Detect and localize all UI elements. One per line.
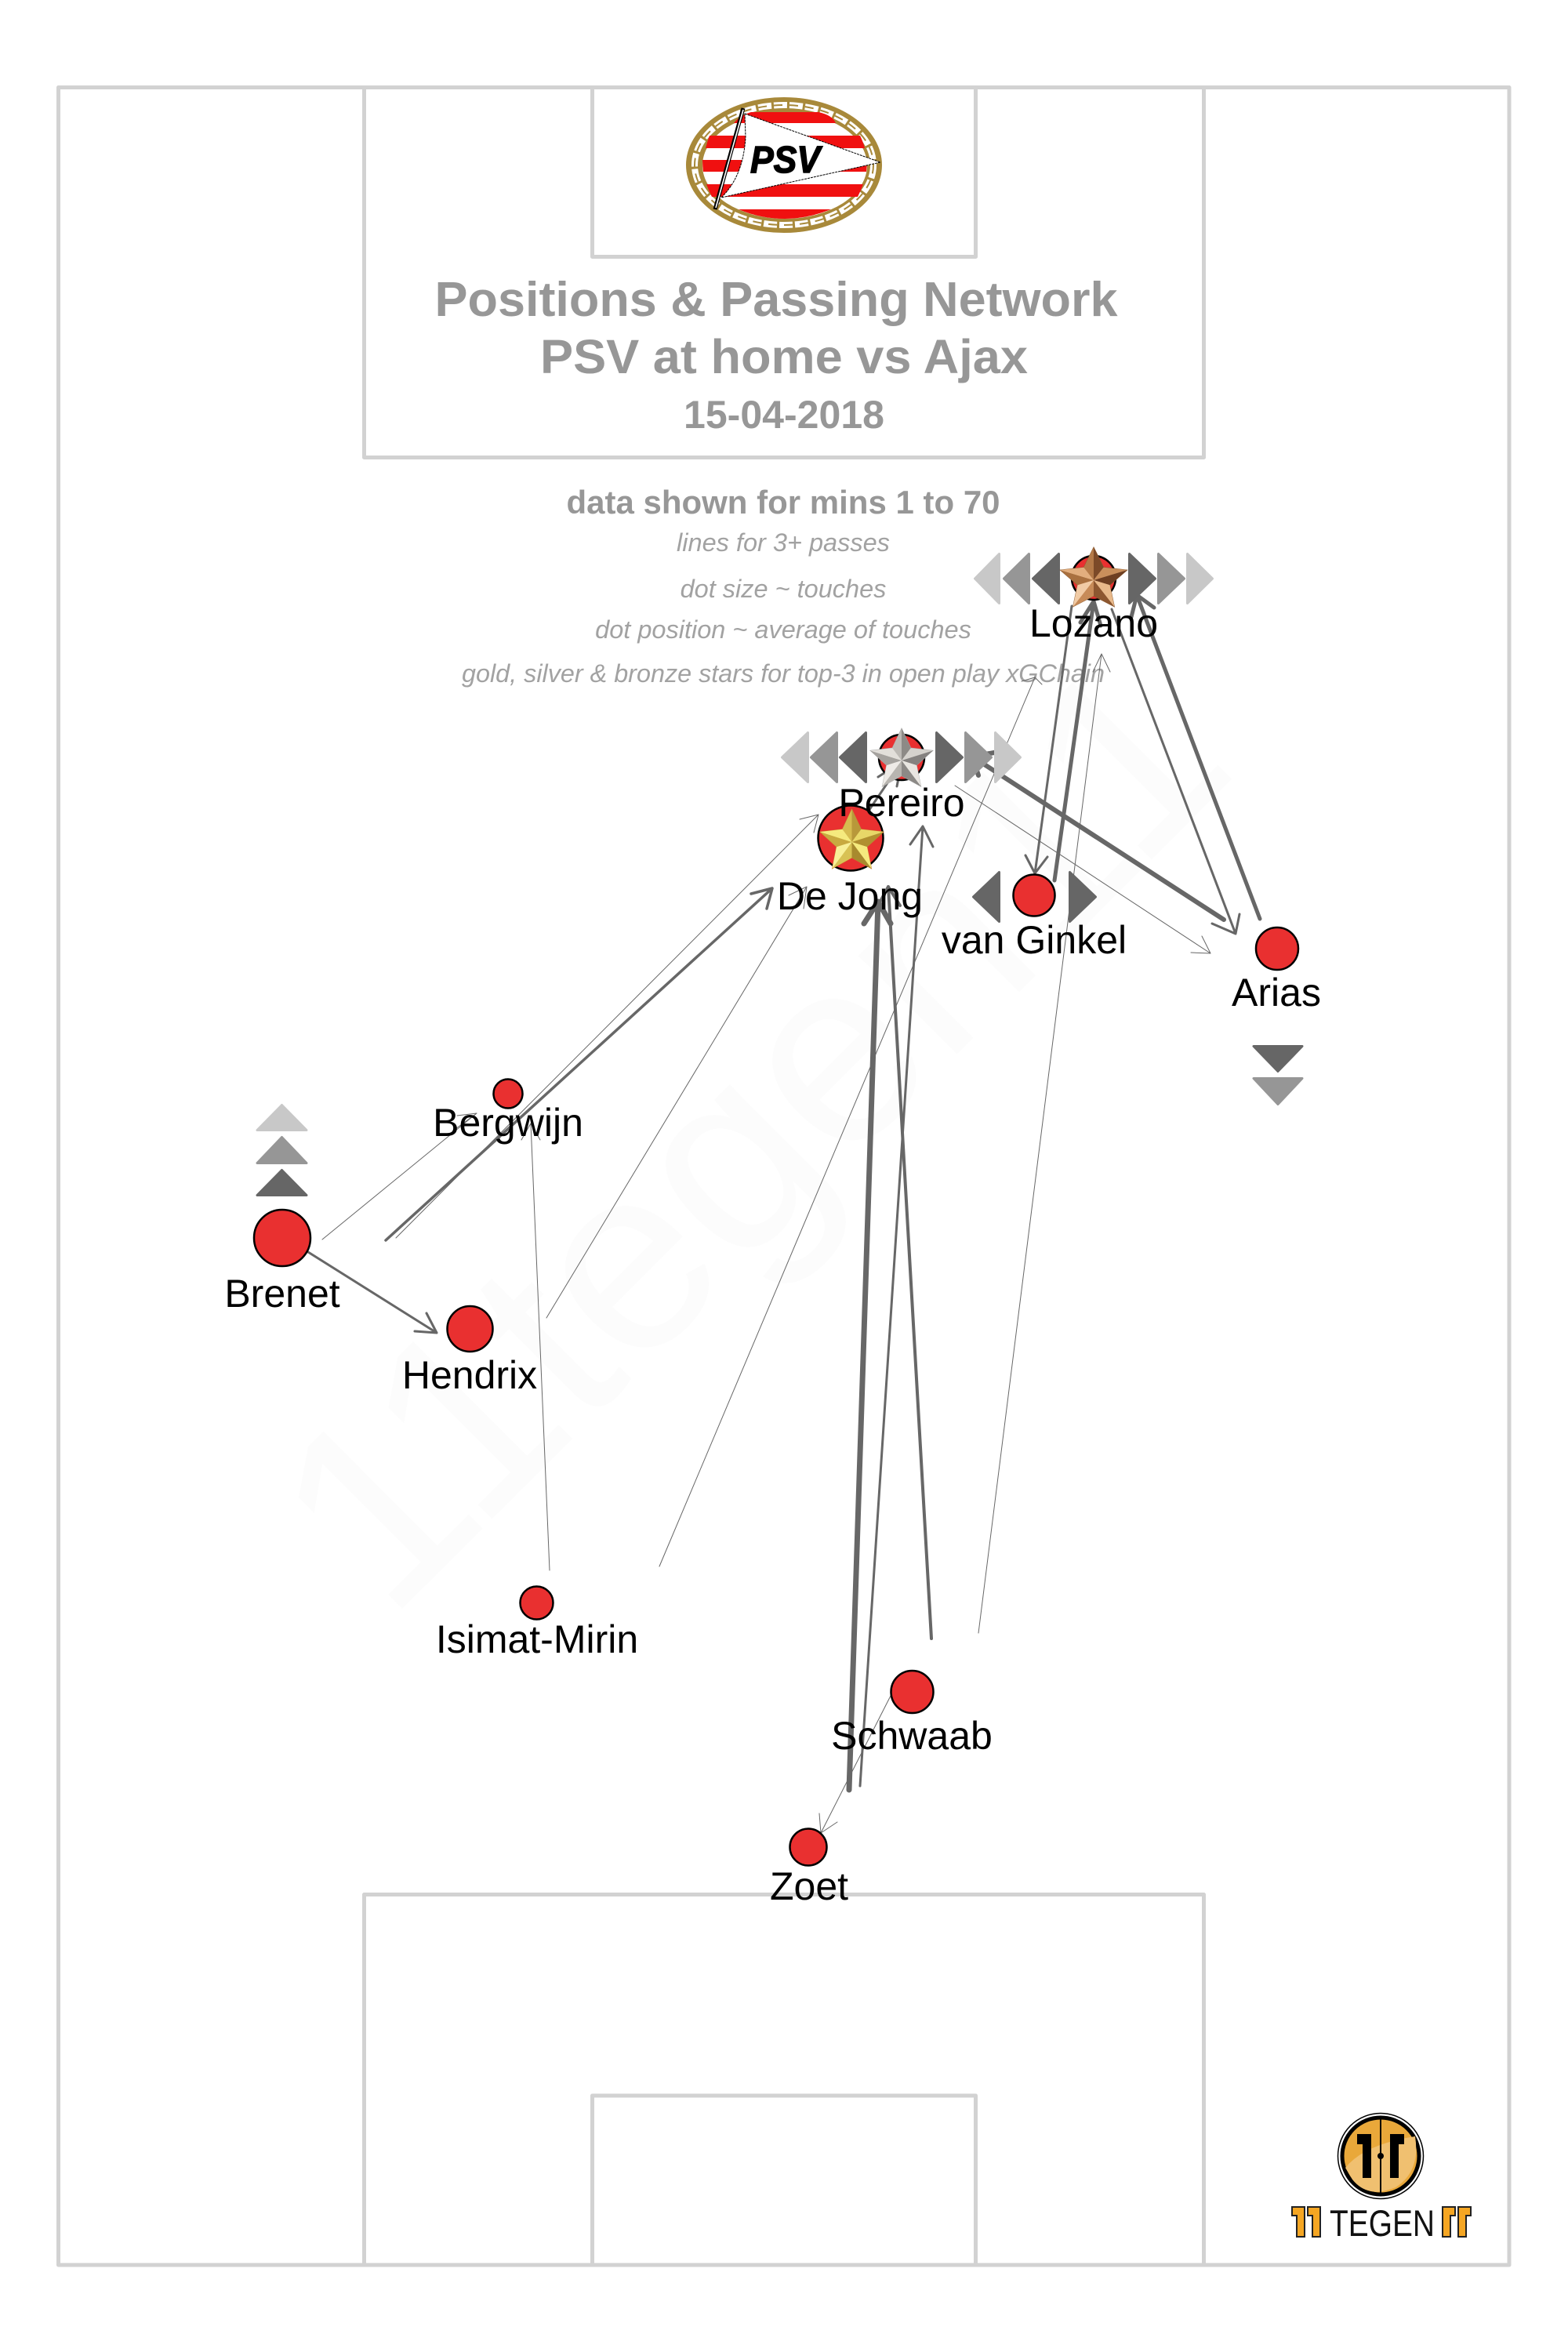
arrow: Lozano to van Ginkel [1025,606,1072,873]
player: Lozano [975,547,1212,645]
arrow: Brenet to De Jong (thin) [396,815,818,1238]
arrow: Zoet to De Jong [849,902,891,1790]
arrow: Brenet to Hendrix [308,1252,437,1333]
title: Positions & Passing Network [434,272,1118,327]
player: Pereiro [782,728,1021,825]
arrow: Schwaab to Pereiro [860,826,933,1786]
legend notes: lines for 3+ passes [677,528,890,557]
arrow: Brenet to De Jong (thick) [386,888,772,1240]
arrow: Pereiro to Arias [955,786,1210,953]
title [434,272,1118,437]
player: Brenet [224,1105,340,1316]
player: Brenet: Brenet [224,1272,340,1316]
icon: silver star [870,728,933,786]
player: Schwaab [831,1671,993,1758]
arrow: Arias to Pereiro [972,753,1224,920]
player: Schwaab: Schwaab [831,1714,993,1758]
passing network arrows [308,595,1260,1833]
title: PSV at home vs Ajax [540,330,1028,384]
player: van Ginkel: van Ginkel [942,918,1127,962]
legend notes: dot position ~ average of touches [595,615,971,644]
legend notes: dot size ~ touches [681,575,886,603]
player: Bergwijn: Bergwijn [433,1101,583,1145]
player: Zoet: Zoet [770,1864,848,1908]
player: Isimat-Mirin: Isimat-Mirin [436,1617,638,1661]
icon: 11tegen11 logo [1292,2114,1471,2244]
arrow: De Jong to Pereiro [867,762,902,813]
title: 15-04-2018 [684,393,884,437]
player: Zoet [770,1828,848,1908]
legend notes: gold, silver & bronze stars for top-3 in open play xGChain [462,659,1105,688]
arrow: Schwaab to De Jong [878,887,931,1639]
player: van Ginkel [942,872,1127,962]
icon: PSV club crest: PSV [750,140,823,181]
icon: bronze star [1060,547,1127,607]
arrow: Brenet to Bergwijn [322,1113,477,1240]
player: Lozano: Lozano [1029,601,1158,645]
player: De Jong [777,806,923,918]
legend notes [462,484,1105,688]
arrow: Lozano to Arias [1112,609,1240,934]
player: Arias [1232,927,1321,1104]
icon: gold star [820,809,884,869]
watermark: 11tegen11: 11tegen11 [220,602,1282,1664]
arrow: van Ginkel to Lozano [1054,601,1101,880]
player: Isimat-Mirin [436,1587,638,1661]
icon: PSV club crest [686,97,882,233]
icon: 11tegen11 logo: TEGEN [1330,2202,1435,2244]
player: Hendrix [402,1306,537,1397]
arrow: Isimat-Mirin to Lozano [659,677,1042,1566]
legend notes: data shown for mins 1 to 70 [566,484,1000,521]
player: Hendrix: Hendrix [402,1353,537,1397]
player: Bergwijn [433,1079,583,1145]
arrow: Arias to Lozano [1131,595,1260,919]
player: Arias: Arias [1232,971,1321,1014]
player: Pereiro: Pereiro [838,781,965,825]
arrow: Isimat-Mirin to Bergwijn [521,1123,550,1570]
player: De Jong: De Jong [777,874,923,918]
arrow: Hendrix to De Jong [546,887,807,1318]
arrow: Schwaab to Zoet [819,1696,891,1833]
arrow: Schwaab to Lozano [978,654,1110,1633]
